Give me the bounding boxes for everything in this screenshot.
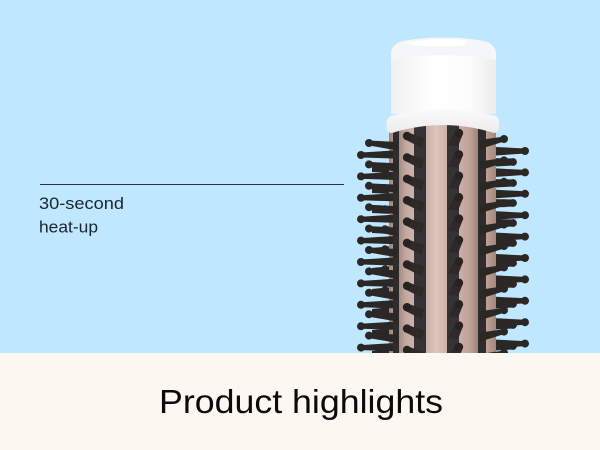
footer heading: Product highlights	[159, 383, 443, 420]
product: round brush	[357, 38, 529, 373]
white cap	[391, 38, 496, 114]
callout text: 30-second	[39, 195, 124, 213]
front bristles	[403, 129, 463, 362]
callout: 30-second heat-up	[39, 184, 344, 236]
back bristles	[372, 158, 517, 357]
cap collar	[386, 109, 499, 133]
side bristles	[357, 135, 529, 373]
callout text: heat-up	[39, 218, 98, 236]
callout leader line	[40, 184, 344, 185]
footer band	[0, 353, 600, 450]
barrel with dark stripes	[389, 120, 496, 353]
sky blue background panel	[0, 0, 600, 353]
